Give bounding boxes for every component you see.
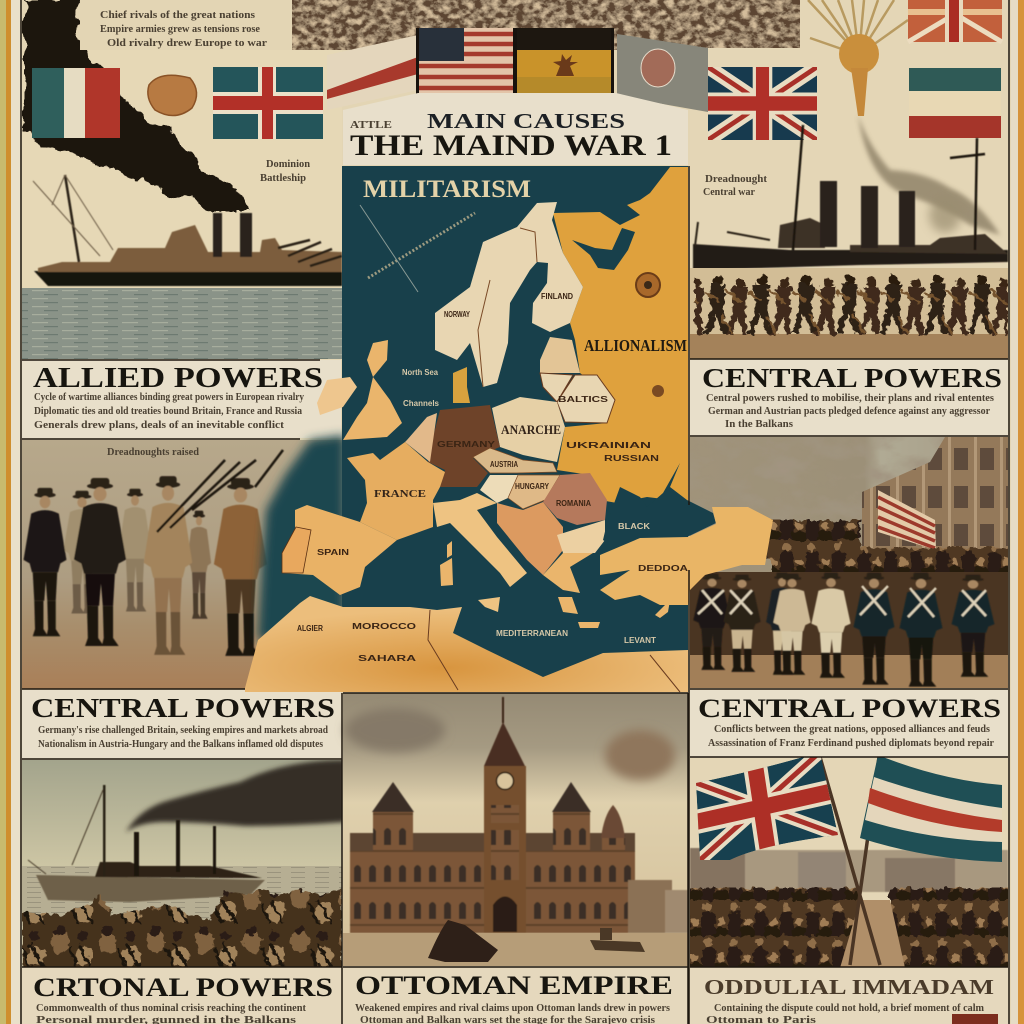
panel: troop ship and crowd: [22, 760, 345, 975]
panel: title: THE MAIND WAR 1: [350, 129, 672, 162]
russia: [553, 167, 688, 503]
chart: map of Europe: [245, 166, 773, 692]
panel: title: [343, 93, 688, 165]
building: [350, 697, 688, 933]
islands: [440, 541, 670, 628]
panel: allied powers label: Diplomatic ties and old treaties bound Britain, France and Russia: [34, 406, 302, 417]
italy: [433, 493, 527, 612]
map country labels: LEVANT: [624, 636, 656, 645]
panel: central powers label right lower: Conflicts between the great nations, opposed alliances and feuds: [714, 724, 990, 735]
panel: central top flags: [327, 28, 708, 113]
map country labels: HUNGARY: [515, 482, 550, 491]
chart: map of Europe: ANARCHE: [501, 422, 561, 437]
panel: central powers label right lower: [690, 690, 1008, 757]
distant city: [690, 848, 1008, 892]
france: [347, 442, 445, 540]
small ship caption: Dominion: [266, 159, 310, 170]
flag: german: [513, 28, 614, 113]
caption: Dreadnought: [705, 174, 768, 185]
map country labels: SAHARA: [358, 654, 416, 663]
parade soldiers: [693, 573, 994, 687]
panel: right warship: [690, 0, 1008, 360]
map country labels: DEDDOA: [638, 564, 688, 573]
battleship: [33, 175, 342, 286]
small ship caption: [260, 159, 310, 184]
panel: central powers label right: Central powers rushed to mobilise, their plans and rival ententes: [706, 393, 994, 404]
panel: title: MAIN CAUSES: [427, 109, 625, 133]
flag: red and white: [327, 35, 418, 110]
flagpoles: [818, 750, 880, 965]
hungary: [508, 475, 560, 509]
sea: [22, 288, 342, 359]
panel: central powers label right: [690, 360, 1008, 436]
flag: italy: [32, 68, 120, 138]
map sea: [342, 166, 688, 692]
czech: [480, 475, 518, 503]
steamship: [28, 785, 265, 902]
map country labels: FINLAND: [541, 292, 573, 301]
flag: nordic cross: [213, 67, 323, 139]
figures: [428, 920, 645, 962]
flag: union large: [696, 752, 838, 860]
panel: soldiers: [22, 440, 342, 689]
chart: map of Europe: FRANCE: [374, 489, 426, 500]
crowd: [22, 890, 342, 975]
panel: odoulial label: ODDULIAL IMMADAM: [704, 975, 994, 999]
map country labels: MOROCCO: [352, 622, 416, 631]
caption: [703, 174, 768, 198]
spain: [282, 505, 397, 595]
icon: small medallion: [652, 385, 664, 397]
top left text strip: Chief rivals of the great nations: [100, 10, 255, 21]
map country labels: Channels: [403, 399, 440, 408]
banners: [765, 520, 860, 560]
belgium: [405, 413, 437, 462]
map sea fade: [258, 435, 345, 640]
icon: medal: [148, 75, 197, 116]
steamship: [693, 125, 1008, 270]
map country labels: RUSSIAN: [604, 454, 659, 463]
ireland: [317, 377, 357, 415]
marching soldiers: [690, 268, 1008, 359]
north africa: [245, 596, 688, 692]
city building: [862, 437, 1008, 552]
scale line: [360, 205, 418, 292]
top left text strip: Old rivalry drew Europe to war: [107, 38, 268, 49]
panel: allied warship: [22, 0, 342, 360]
germany: [428, 405, 500, 487]
map country labels: AUSTRIA: [490, 460, 518, 469]
sun: [808, 0, 908, 116]
poland: [492, 397, 565, 462]
flag: parade: [878, 490, 936, 550]
scandinavia: [435, 202, 583, 387]
icon: orange medallion: [636, 273, 660, 297]
panel: odoulial label: [690, 968, 1008, 1024]
panel: central powers label left: [22, 690, 341, 758]
map country labels: MEDITERRANEAN: [496, 629, 568, 638]
great britain: [343, 340, 402, 440]
denmark: [453, 367, 470, 403]
flag: american: [416, 28, 514, 113]
map country labels: BALTICS: [558, 395, 609, 404]
panel: central powers label right: CENTRAL POWERS: [702, 363, 1002, 393]
top left text strip: [80, 0, 292, 50]
panel: ottoman label: Weakened empires and rival claims upon Ottoman lands drew in powers: [355, 1003, 670, 1014]
panel: central powers label left: CENTRAL POWERS: [31, 693, 335, 723]
courtyard: [343, 933, 688, 966]
naval route: [368, 213, 475, 278]
panel: ottoman label: OTTOMAN EMPIRE: [355, 971, 673, 1000]
panel: ottoman label: [343, 968, 687, 1024]
top left text strip: Empire armies grew as tensions rose: [100, 24, 261, 35]
map country labels: ALGIER: [297, 624, 323, 633]
baltic: [540, 337, 580, 373]
flag: union right: [708, 67, 817, 140]
panel: central powers label right lower: CENTRAL POWERS: [698, 694, 1001, 723]
crowd: [770, 546, 1008, 572]
caption: Central war: [703, 187, 756, 198]
map country labels: North Sea: [402, 368, 439, 377]
map country labels: BLACK: [618, 522, 650, 531]
map headings: MILITARISM: [363, 176, 531, 203]
smoke plume: [24, 0, 252, 212]
northern bay: [572, 228, 635, 270]
panel: crtonal powers label: [22, 968, 341, 1024]
panel: crtonal powers label: CRTONAL POWERS: [33, 973, 333, 1002]
panel: crtonal powers label: Commonwealth of thus nominal crisis reaching the continent: [36, 1003, 307, 1014]
panel: central powers label right lower: Assassination of Franz Ferdinand pushed diplomats beyond repair: [708, 738, 995, 749]
panel: allied powers label: [22, 360, 341, 438]
panel: city and parade: [690, 437, 1010, 688]
soldiers caption: Dreadnoughts raised: [107, 447, 199, 458]
smoke puff: [929, 197, 961, 233]
smoke: [858, 115, 1000, 235]
panel: ottoman building: [343, 693, 688, 966]
map country labels: ROMANIA: [556, 499, 591, 508]
map country labels: SPAIN: [317, 548, 349, 557]
panel: central powers label right: In the Balkans: [725, 419, 793, 430]
flag: union top: [908, 0, 1002, 42]
crowd: [690, 886, 1008, 966]
panel: allied powers label: Cycle of wartime alliances binding great powers in European rivalry: [34, 392, 304, 403]
romania: [543, 473, 607, 525]
austria: [473, 448, 557, 473]
panel: title: ATTLE: [350, 120, 392, 131]
serbia: [497, 502, 563, 575]
map country labels: [297, 292, 688, 663]
bulgaria: [557, 520, 605, 553]
small ship caption: Battleship: [260, 173, 306, 184]
panel: allied powers label: Generals drew plans, deals of an inevitable conflict: [34, 420, 285, 431]
flag: grey crest: [617, 34, 708, 112]
map country labels: UKRAINIAN: [566, 441, 651, 450]
soldier group: [24, 450, 283, 656]
water: [22, 866, 342, 926]
flag: tricolour: [909, 68, 1001, 138]
smoke: [126, 760, 345, 832]
map country labels: GERMANY: [437, 440, 496, 449]
panel: central powers label right: German and Austrian pacts pledged defence against any aggressor: [708, 406, 991, 417]
map country labels: NORWAY: [444, 310, 470, 319]
greece: [543, 553, 593, 614]
panel: allied powers label: ALLIED POWERS: [33, 363, 323, 394]
panel: central powers label left: Germany's rise challenged Britain, seeking empires and markets abroad: [38, 725, 328, 736]
panel: crossed flags: [690, 758, 1008, 966]
top engraved frieze left: [290, 0, 800, 50]
panel: central powers label left: Nationalism in Austria-Hungary and the Balkans inflamed old disputes: [38, 739, 323, 750]
red stamp: [952, 1014, 998, 1024]
black sea: [603, 463, 716, 550]
chart: map of Europe: ALLIONALISM: [584, 336, 687, 355]
flag: striped large: [860, 755, 1002, 862]
clouds: [345, 708, 675, 780]
panel: odoulial label: Containing the dispute could not hold, a brief moment of calm: [714, 1003, 985, 1014]
turkey: [600, 507, 773, 605]
